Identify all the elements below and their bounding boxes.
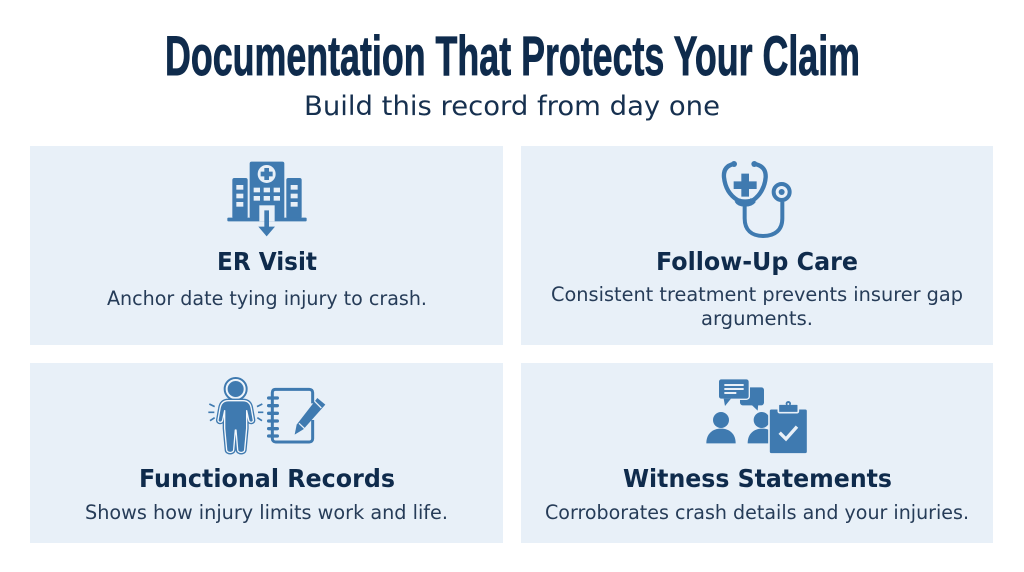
heading: Follow-Up Care bbox=[656, 247, 858, 276]
description bbox=[551, 283, 963, 330]
panel: Witness Statements bbox=[521, 363, 993, 543]
icon: person and notebook bbox=[208, 378, 325, 452]
heading: Functional Records bbox=[139, 464, 395, 493]
panel: Functional Records bbox=[30, 363, 503, 543]
icon: stethoscope bbox=[724, 161, 790, 236]
description: Consistent treatment prevents insurer gap bbox=[551, 283, 963, 306]
subtitle: Build this record from day one bbox=[304, 91, 720, 122]
panel: ER Visit bbox=[30, 146, 503, 345]
panel: Follow-Up Care bbox=[521, 146, 993, 345]
heading: ER Visit bbox=[217, 247, 317, 276]
description: Corroborates crash details and your injuries. bbox=[545, 501, 969, 524]
description: arguments. bbox=[701, 307, 813, 330]
icon: hospital bbox=[227, 162, 307, 236]
description: Shows how injury limits work and life. bbox=[85, 501, 448, 524]
description: Anchor date tying injury to crash. bbox=[107, 287, 427, 310]
icon: witnesses and clipboard bbox=[706, 379, 808, 454]
heading: Witness Statements bbox=[623, 464, 892, 493]
